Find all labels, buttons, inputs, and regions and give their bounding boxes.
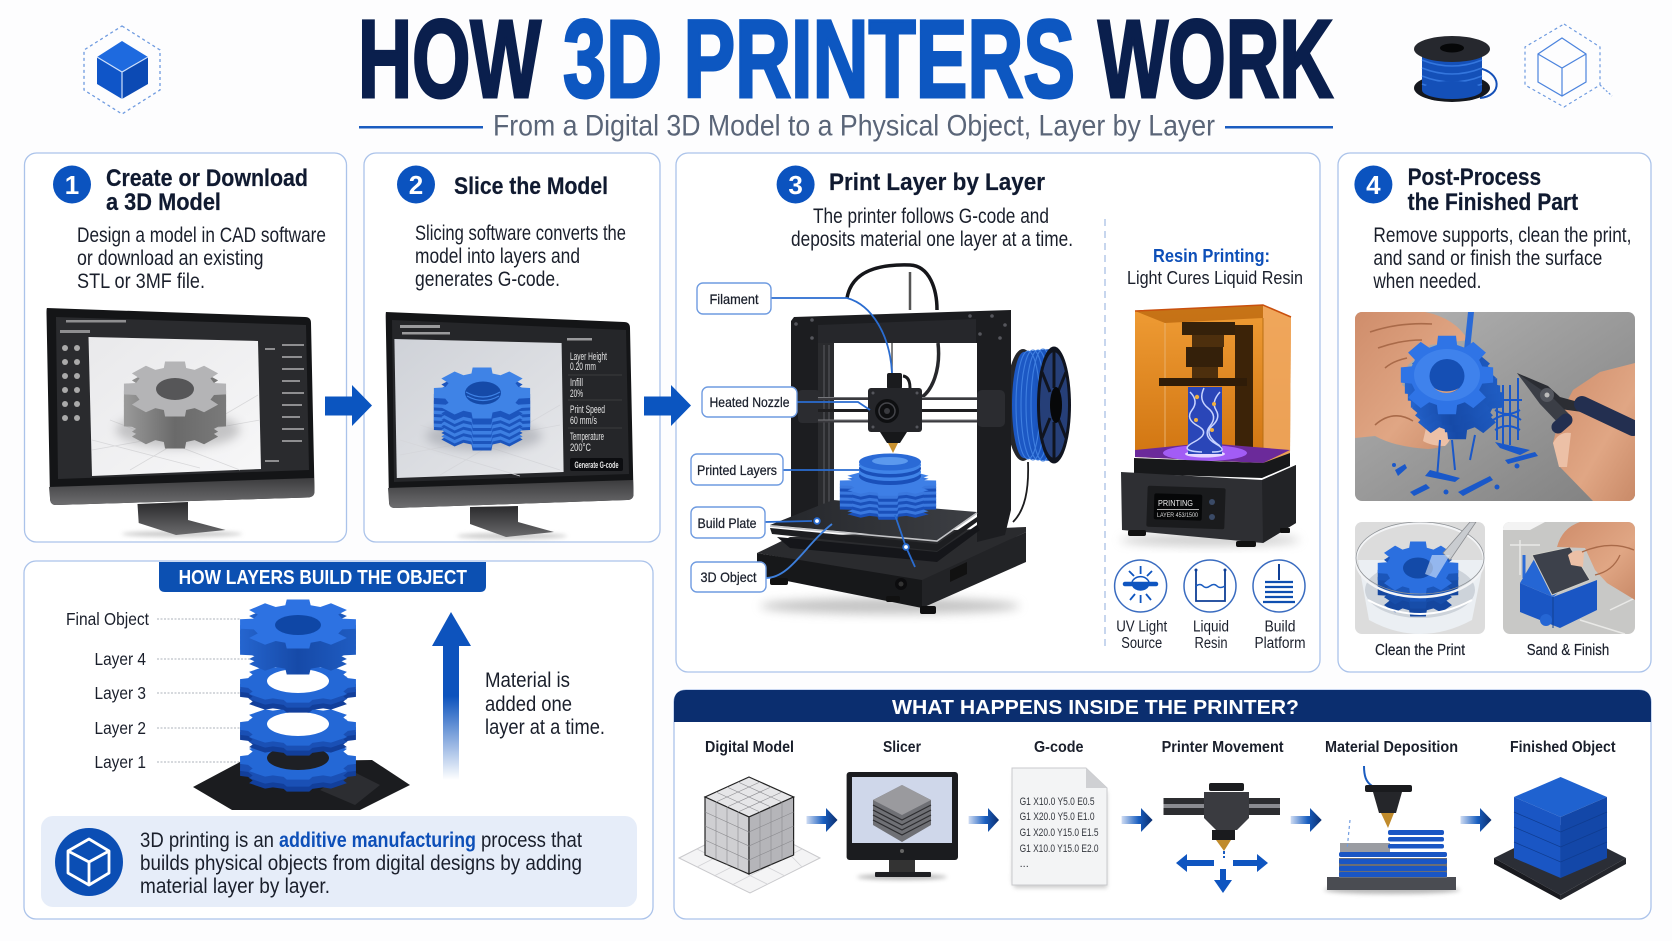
step 4 number badge	[1354, 166, 1392, 204]
step 1 description: STL or 3MF file.	[77, 270, 205, 293]
slicer settings	[570, 351, 607, 454]
stage: g-code document: G1 X10.0 Y15.0 E2.0	[1020, 843, 1099, 855]
arrow: step 2 to step 3	[644, 385, 691, 426]
stage: material deposition	[1324, 766, 1460, 894]
callout text: builds physical objects from digital designs by adding	[140, 852, 582, 875]
inside panel header	[674, 690, 1651, 722]
step 4 number badge: 4	[1366, 170, 1381, 200]
printer base	[757, 527, 1026, 614]
printed gear on bed	[840, 454, 936, 520]
panel: step 3	[676, 153, 1320, 672]
step 4 description	[1373, 224, 1631, 293]
stage labels: Printer Movement	[1162, 739, 1284, 756]
slicer settings: Print Speed	[570, 404, 605, 416]
stage: g-code document: G1 X20.0 Y5.0 E1.0	[1020, 811, 1095, 823]
resin icon captions: Platform	[1254, 635, 1306, 652]
slicer settings: Infill	[570, 377, 583, 389]
layers header tab	[159, 562, 486, 592]
step 2 description: generates G-code.	[415, 268, 560, 291]
icon: build platform	[1253, 560, 1305, 612]
build plate	[770, 500, 980, 562]
final object gear	[240, 599, 356, 675]
panel: how layers build the object	[24, 561, 653, 919]
upward arrow	[432, 612, 471, 780]
label: Filament	[697, 283, 771, 314]
label: 3D Object: 3D Object	[700, 569, 757, 585]
step 2 heading: Slice the Model	[454, 173, 608, 200]
monitor with slicer software: Generate G-code	[574, 460, 618, 471]
stage: g-code document: G1 X20.0 Y15.0 E1.5	[1020, 827, 1099, 839]
callout: additive manufacturing	[41, 816, 637, 907]
slicer settings: 200°C	[570, 442, 591, 454]
icon: UV light source	[1115, 560, 1167, 612]
step 4 heading	[1408, 164, 1578, 216]
FDM printer illustration	[757, 265, 1071, 614]
layers header tab: HOW LAYERS BUILD THE OBJECT	[179, 567, 467, 589]
slicer settings: 0.20 mm	[570, 361, 596, 373]
step 2 description	[415, 222, 626, 291]
label: Heated Nozzle: Heated Nozzle	[710, 394, 790, 410]
arrow	[969, 808, 999, 832]
layer labels: Layer 1	[94, 752, 146, 772]
stage labels: Digital Model	[705, 739, 794, 756]
step 1 description: or download an existing	[77, 247, 264, 270]
stage labels: G-code	[1034, 739, 1084, 756]
resin printer illustration: PRINTING	[1158, 498, 1193, 508]
step 3 number badge	[777, 166, 815, 204]
resin icon captions: Build	[1264, 618, 1296, 636]
label: 3D Object	[691, 562, 766, 592]
stage labels: Material Deposition	[1325, 739, 1458, 756]
step 1 heading: a 3D Model	[106, 189, 221, 216]
callout text: 3D printing is an	[140, 829, 274, 852]
slicer settings: Temperature	[570, 431, 604, 443]
step 3 description: The printer follows G-code and	[813, 205, 1049, 228]
stage: g-code document	[1012, 768, 1107, 888]
label: Heated Nozzle	[702, 387, 797, 417]
stage: slicer monitor	[847, 772, 958, 880]
step 2 description: model into layers and	[415, 245, 580, 268]
step 1 description	[77, 224, 326, 293]
monitor with CAD model	[46, 308, 314, 537]
resin printing heading: Light Cures Liquid Resin	[1127, 267, 1303, 288]
material added note: layer at a time.	[485, 716, 605, 739]
step 1 description: Design a model in CAD software	[77, 224, 326, 247]
arrow	[1460, 808, 1492, 832]
arrow	[806, 808, 838, 832]
layer labels: Final Object	[66, 609, 149, 629]
callout text	[140, 829, 582, 898]
layer labels: Layer 4	[94, 649, 146, 669]
layer 2	[240, 706, 356, 756]
layer labels	[66, 609, 149, 772]
title: WORK	[1098, 0, 1333, 121]
photo captions	[1375, 642, 1609, 659]
resin icon captions: Source	[1121, 635, 1162, 652]
printer frame	[791, 310, 1011, 542]
photo captions: Sand & Finish	[1527, 642, 1609, 659]
resin icon captions: Resin	[1194, 635, 1228, 652]
label: Build Plate: Build Plate	[698, 515, 757, 531]
panel: step 1	[24, 153, 346, 542]
resin printer illustration: LAYER 453/1500	[1157, 512, 1198, 519]
layer 3	[240, 663, 356, 713]
step 4 description: when needed.	[1373, 270, 1481, 293]
material added note	[485, 669, 605, 739]
layer 1	[240, 740, 356, 792]
step 3 description	[791, 205, 1073, 251]
stage: digital model	[679, 777, 820, 893]
photo: cleaning the print	[1355, 522, 1485, 634]
stage: printer movement	[1164, 783, 1280, 893]
resin printing heading: Resin Printing:	[1153, 246, 1270, 266]
step 4 heading: Post-Process	[1408, 164, 1541, 191]
stage: finished object	[1494, 777, 1626, 900]
panel: step 4	[1338, 153, 1651, 672]
material added note: Material is	[485, 669, 570, 692]
label: Filament: Filament	[710, 291, 759, 307]
stage: g-code document: G1 X10.0 Y5.0 E0.5	[1020, 796, 1095, 808]
stage labels	[705, 739, 1616, 756]
step 3 number badge: 3	[788, 170, 803, 200]
step 4 heading: the Finished Part	[1408, 189, 1578, 216]
step 2 number badge	[397, 166, 435, 204]
panel: step 2	[364, 153, 660, 542]
icon: dashed wireframe cube	[1525, 24, 1612, 107]
icon: liquid resin	[1184, 560, 1236, 612]
slicer settings: 20%	[570, 388, 583, 400]
callout lines	[765, 298, 915, 578]
callout text: process that	[481, 829, 582, 852]
inside panel header: WHAT HAPPENS INSIDE THE PRINTER?	[892, 697, 1299, 719]
icon: blue cube with dashed box	[84, 26, 160, 114]
callout text: additive manufacturing	[279, 829, 476, 852]
photo captions: Clean the Print	[1375, 642, 1466, 659]
material added note: added one	[485, 693, 572, 716]
icon: cube badge	[55, 828, 123, 896]
step 3 heading: Print Layer by Layer	[829, 169, 1045, 196]
gantry rods	[818, 398, 977, 421]
photo: removing supports	[1355, 312, 1635, 501]
subtitle: From a Digital 3D Model to a Physical Object, Layer by Layer	[493, 110, 1215, 142]
stage labels: Slicer	[883, 739, 921, 756]
stage: g-code document: ...	[1020, 858, 1029, 870]
resin printing heading	[1127, 246, 1303, 288]
arrow	[1122, 808, 1153, 832]
icon: filament spool	[1414, 36, 1497, 102]
step 3 description: deposits material one layer at a time.	[791, 228, 1073, 251]
label: Build Plate	[691, 507, 765, 538]
label: Printed Layers: Printed Layers	[697, 462, 777, 478]
photo: sanding	[1503, 522, 1635, 634]
step 4 description: and sand or finish the surface	[1373, 247, 1602, 270]
title: 3D PRINTERS	[563, 0, 1075, 121]
panel: what happens inside the printer	[674, 690, 1651, 919]
print head	[868, 373, 922, 453]
resin icon captions: Liquid	[1193, 618, 1229, 636]
arrow: step 1 to step 2	[325, 385, 372, 426]
layer labels: Layer 2	[94, 718, 146, 738]
stage labels: Finished Object	[1510, 739, 1616, 756]
step 1 number badge: 1	[65, 170, 79, 200]
label: Printed Layers	[691, 454, 783, 485]
step 2 description: Slicing software converts the	[415, 222, 626, 245]
arrow	[1291, 808, 1322, 832]
resin icon captions: UV Light	[1116, 618, 1168, 636]
spool on printer	[1006, 346, 1071, 464]
layer labels: Layer 3	[94, 683, 146, 703]
step 1 heading	[106, 165, 308, 216]
monitor with slicer software	[386, 312, 634, 539]
title: HOW	[358, 0, 541, 121]
slicer settings: 60 mm/s	[570, 415, 597, 427]
resin printer illustration	[1120, 305, 1300, 547]
step 1 number badge	[53, 166, 91, 204]
step 1 heading: Create or Download	[106, 165, 308, 192]
step 2 number badge: 2	[409, 170, 423, 200]
resin icon captions	[1116, 618, 1306, 652]
slicer settings: Layer Height	[570, 351, 607, 363]
callout text: material layer by layer.	[140, 875, 330, 898]
exploded gear layers	[193, 599, 410, 810]
